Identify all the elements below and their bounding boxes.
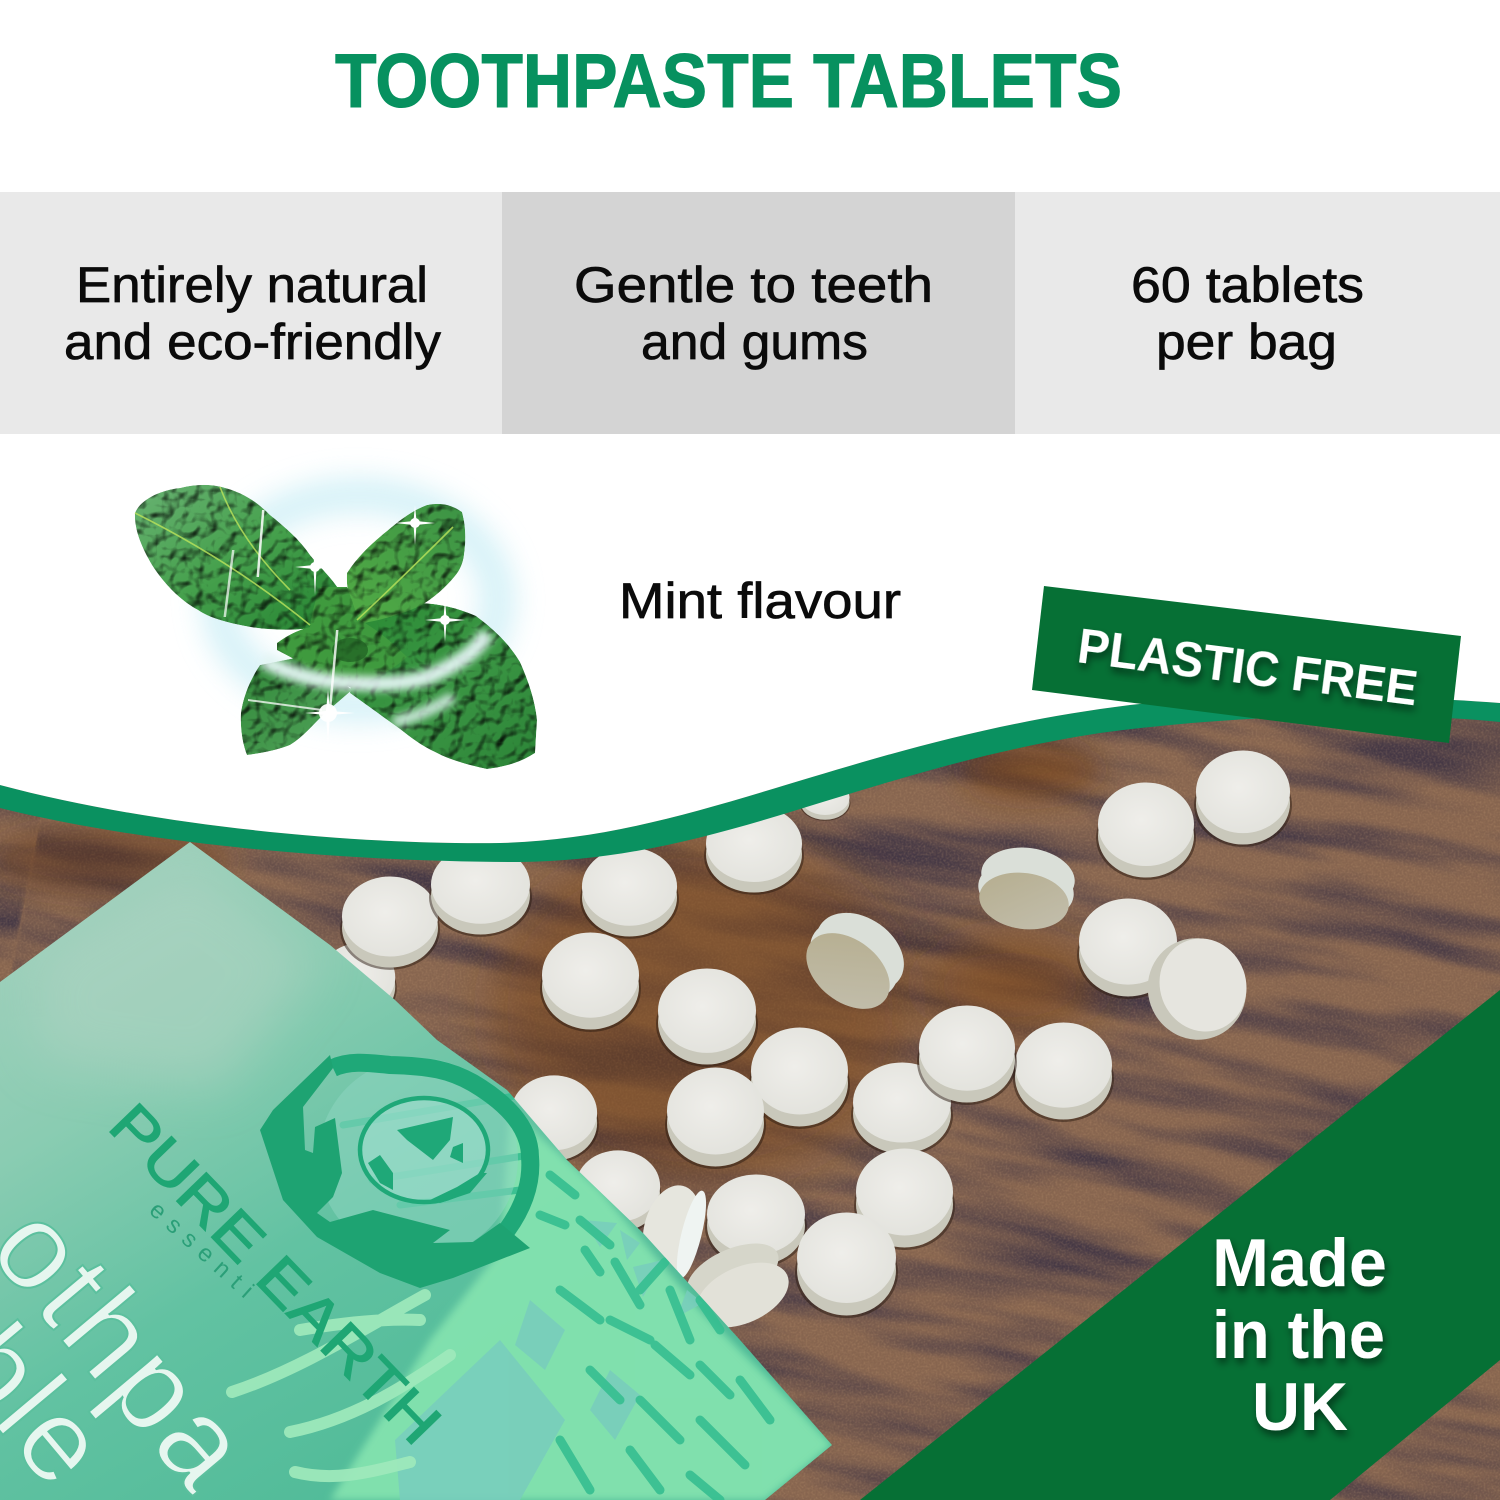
banner: plastic free	[1032, 586, 1461, 743]
brand subtext: essenti	[144, 1196, 265, 1309]
icon: lower swirl	[393, 697, 453, 722]
bag pale upper wash	[40, 884, 306, 1094]
tablet rotated, right cluster	[1134, 924, 1260, 1054]
tablets scattered on table	[319, 750, 1292, 1341]
panel: gentle to teeth	[502, 192, 1015, 434]
tablet on its edge, upper right	[974, 842, 1079, 935]
panel: gentle to teeth: Gentle to teeth	[574, 257, 933, 313]
bag teal windows	[395, 1220, 703, 1500]
panel: 60 tablets: 60 tablets	[1131, 257, 1364, 313]
bag pale leaf blades	[232, 1295, 450, 1476]
panel: entirely natural	[0, 192, 502, 434]
mint leaves with glow	[135, 485, 537, 769]
label: mint flavour: Mint flavour	[619, 573, 901, 629]
icon: leaf veins	[135, 487, 453, 625]
bag botanical pattern	[343, 1095, 770, 1500]
tablet on its side near bag	[634, 1179, 712, 1280]
tablet tilted near bag	[678, 1231, 799, 1341]
icon: leaves	[135, 485, 537, 769]
logo ring	[333, 1063, 530, 1230]
logo pale disc	[324, 1060, 518, 1243]
icon: dark centre	[332, 638, 368, 662]
banner: made in the uk: UK	[1252, 1369, 1348, 1445]
banner: made in the uk	[860, 990, 1500, 1500]
logo	[260, 1055, 530, 1288]
panel: 60 tablets	[1015, 192, 1500, 434]
panel: gentle to teeth: and gums	[641, 314, 868, 370]
tablet on its edge, centre	[792, 897, 919, 1024]
panel: entirely natural: and eco-friendly	[64, 314, 441, 370]
brand text: PURE EARTH	[97, 1090, 454, 1457]
logo hands	[260, 1055, 530, 1288]
logo continents	[368, 1117, 487, 1203]
title: TOOTHPASTE TABLETS	[335, 39, 1122, 124]
icon: glow halo	[218, 495, 498, 705]
icon: sparkles	[224, 505, 465, 745]
wave: white top area	[0, 434, 1500, 843]
bag bright front panel	[330, 1110, 832, 1500]
panel: entirely natural: Entirely natural	[76, 257, 428, 313]
banner: made in the uk: in the	[1212, 1297, 1385, 1373]
logo globe	[360, 1098, 488, 1202]
panel: 60 tablets: per bag	[1156, 314, 1337, 370]
product bag	[0, 840, 840, 1500]
banner: plastic free: PLASTIC FREE	[1075, 619, 1421, 716]
banner: made in the uk: Made	[1212, 1225, 1387, 1301]
photo: wooden table	[0, 690, 1500, 1500]
wave: green band	[0, 696, 1500, 862]
icon: white swirl	[263, 633, 487, 684]
